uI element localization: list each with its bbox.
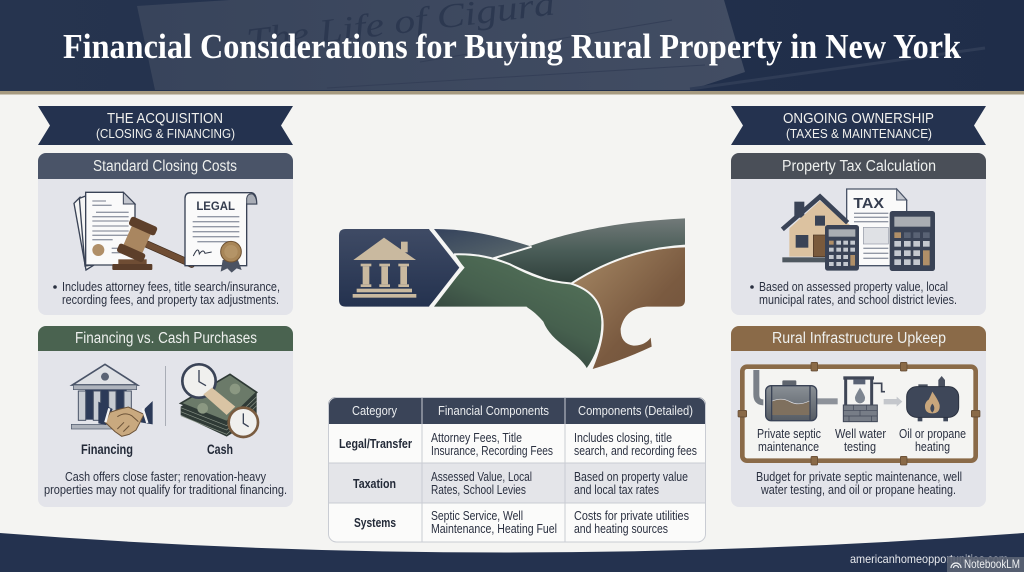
table row: taxation xyxy=(353,470,688,497)
table header row: Category xyxy=(352,403,397,418)
table row: legal/transfer: Legal/Transfer xyxy=(339,436,412,451)
central graphic: diverging paths from bank to land xyxy=(339,218,685,369)
body text: Budget for private septic maintenance, well xyxy=(756,470,962,484)
table row: legal/transfer xyxy=(339,431,697,458)
footer band xyxy=(0,533,1024,572)
table header row: Financial Components xyxy=(438,403,549,418)
navy-grey strip xyxy=(434,229,532,258)
header band xyxy=(0,0,1024,94)
panel: ongoing ownership banner xyxy=(731,106,986,145)
label: oil or propane heating xyxy=(899,427,966,454)
icon: bank and handshake xyxy=(71,364,153,436)
panel: the acquisition banner: THE ACQUISITION xyxy=(107,110,223,127)
table row: systems: Maintenance, Heating Fuel xyxy=(431,522,557,536)
comparison table xyxy=(328,397,706,542)
bullet text: recording fees, and property tax adjustments. xyxy=(62,293,279,307)
table row: systems: Septic Service, Well xyxy=(431,509,523,523)
icon: water well xyxy=(843,376,885,422)
body text xyxy=(756,470,962,497)
icon: copper pipe frame xyxy=(738,362,980,465)
panel: ongoing ownership banner: ONGOING OWNERSHIP xyxy=(783,110,934,127)
title: Financial Considerations for Buying Rural Property in New York xyxy=(63,27,961,66)
table row: legal/transfer: Attorney Fees, Title xyxy=(431,431,522,445)
panel: ongoing ownership banner: (TAXES & MAINTENANCE) xyxy=(786,126,932,141)
bullet text: Based on assessed property value, local xyxy=(759,280,948,294)
heading: rural infrastructure upkeep: Rural Infrastructure Upkeep xyxy=(772,330,946,347)
icon: documents, gavel and legal scroll: LEGAL xyxy=(196,199,235,213)
table row: taxation: Based on property value xyxy=(574,470,688,484)
table row: taxation: Rates, School Levies xyxy=(431,483,526,497)
heading: property tax calculation: Property Tax Calculation xyxy=(782,158,936,175)
label: cash: Cash xyxy=(207,442,233,457)
table row: legal/transfer: Includes closing, title xyxy=(574,431,672,445)
table row: systems: Systems xyxy=(354,515,396,530)
panel: financing vs cash xyxy=(38,326,293,507)
grey-green upper band xyxy=(497,218,685,283)
white separators xyxy=(430,229,685,369)
bullet text: municipal rates, and school district levies. xyxy=(759,293,957,307)
divider xyxy=(165,366,166,426)
icon: house, tax form and calculators xyxy=(782,189,935,271)
table row: systems: and heating sources xyxy=(574,522,668,536)
panel: rural infrastructure upkeep xyxy=(731,326,986,507)
table row: legal/transfer: search, and recording fees xyxy=(574,444,697,458)
label: well water testing: testing xyxy=(844,440,876,454)
table row: taxation: Taxation xyxy=(353,476,396,491)
icon: septic tank xyxy=(756,370,838,421)
table row: taxation: Assessed Value, Local xyxy=(431,470,532,484)
label: private septic maintenance xyxy=(757,427,821,454)
panel: the acquisition banner xyxy=(38,106,293,145)
arrow xyxy=(884,397,902,407)
label: oil or propane heating: Oil or propane xyxy=(899,427,966,441)
label: private septic maintenance: maintenance xyxy=(758,440,819,454)
heading: standard closing costs: Standard Closing Costs xyxy=(93,158,237,175)
body text: properties may not qualify for traditional financing. xyxy=(44,483,287,497)
panel: the acquisition banner: (CLOSING & FINANCING) xyxy=(96,126,235,141)
label: private septic maintenance: Private septic xyxy=(757,427,821,441)
bullet text xyxy=(750,280,957,307)
label: well water testing xyxy=(835,427,886,454)
navy bank block xyxy=(339,229,459,307)
bullet text: Includes attorney fees, title search/insurance, xyxy=(62,280,280,294)
icon: propane tank xyxy=(907,376,959,421)
label: oil or propane heating: heating xyxy=(915,440,950,454)
label: financing: Financing xyxy=(81,442,133,457)
icon: bank building xyxy=(353,238,416,298)
green band xyxy=(434,254,602,369)
bullet text xyxy=(53,280,280,307)
label: well water testing: Well water xyxy=(835,427,886,441)
heading: financing vs cash: Financing vs. Cash Purchases xyxy=(75,330,257,347)
panel: standard closing costs xyxy=(38,153,293,315)
panel: property tax calculation xyxy=(731,153,986,315)
icon: house, tax form and calculators: TAX xyxy=(853,196,884,212)
table row: systems xyxy=(354,509,689,536)
brown band xyxy=(572,247,685,369)
footer band: americanhomeopportunities.com xyxy=(850,552,1008,566)
icon: cash and clocks xyxy=(181,364,258,437)
icon: documents, gavel and legal scroll xyxy=(74,192,257,283)
body text: water testing, and oil or propane heating. xyxy=(760,483,956,497)
table header row: Components (Detailed) xyxy=(578,403,693,418)
table row: taxation: and local tax rates xyxy=(574,483,659,497)
table header row xyxy=(352,403,693,418)
table row: systems: Costs for private utilities xyxy=(574,509,689,523)
body text: Cash offers close faster; renovation-heavy xyxy=(65,470,267,484)
table row: legal/transfer: Insurance, Recording Fees xyxy=(431,444,553,458)
body text xyxy=(44,470,287,497)
